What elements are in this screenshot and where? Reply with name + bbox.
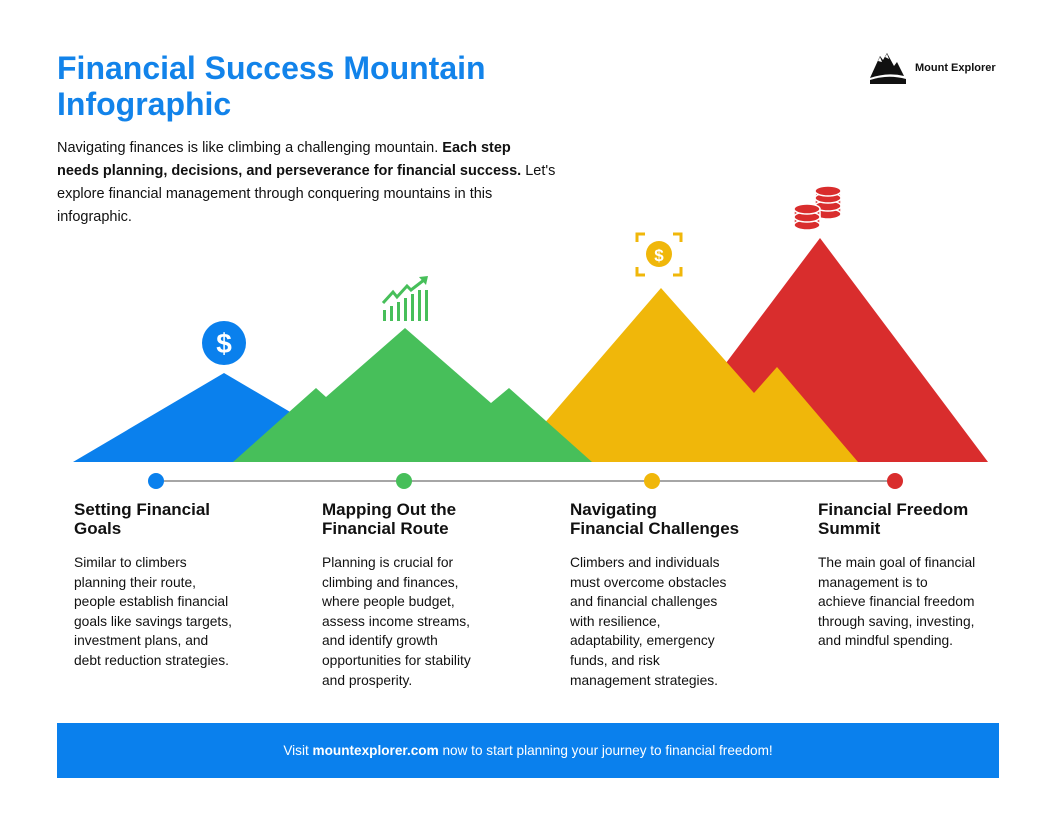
title: Financial Success Mountain: [57, 50, 486, 86]
mountains chart: [73, 186, 988, 489]
column: challenges: adaptability, emergency: [570, 633, 715, 648]
column: summit: The main goal of financial: [818, 555, 975, 570]
column: summit: Financial Freedom: [818, 500, 968, 519]
intro text: infographic.: [57, 209, 132, 225]
mountain: green: [233, 328, 592, 462]
column: summit: [818, 500, 975, 648]
column: challenges: Climbers and individuals: [570, 555, 720, 570]
column: setting goals: debt reduction strategies.: [74, 653, 229, 668]
column: mapping route: Planning is crucial for: [322, 555, 453, 570]
icon: dollar circle: $: [216, 328, 232, 359]
column: setting goals: Similar to climbers: [74, 555, 187, 570]
column: mapping route: opportunities for stability: [322, 653, 471, 668]
column: challenges: must overcome obstacles: [570, 575, 726, 590]
column: challenges: with resilience,: [570, 614, 660, 629]
column: mapping route: and prosperity.: [322, 673, 412, 688]
column: mapping route: assess income streams,: [322, 614, 470, 629]
mountain: red: [700, 238, 988, 462]
title: [57, 50, 486, 122]
column: setting goals: planning their route,: [74, 575, 196, 590]
footer banner: [57, 723, 999, 778]
column: challenges: Financial Challenges: [570, 519, 739, 538]
column: challenges: [570, 500, 739, 688]
column: summit: Summit: [818, 519, 880, 538]
column: mapping route: [322, 500, 471, 688]
footer banner: Visit mountexplorer.com now to start planning your journey to financial freedom!: [283, 743, 773, 758]
icon: coins: [794, 186, 841, 230]
mountain: blue: [73, 373, 375, 462]
column: summit: achieve financial freedom: [818, 594, 974, 609]
intro text: explore financial management through conquering mountains in this: [57, 186, 492, 202]
icon: growth chart: [383, 276, 428, 321]
logo: Mount Explorer: [915, 62, 996, 74]
column: mapping route: where people budget,: [322, 594, 455, 609]
intro text: Navigating finances is like climbing a challenging mountain. Each step: [57, 140, 511, 156]
column: setting goals: Setting Financial: [74, 500, 210, 519]
column: mapping route: Financial Route: [322, 519, 449, 538]
logo: [870, 53, 996, 84]
icon: dollar focus: [637, 234, 681, 275]
column: mapping route: and identify growth: [322, 633, 438, 648]
column: challenges: funds, and risk: [570, 653, 660, 668]
column: challenges: and financial challenges: [570, 594, 717, 609]
column: mapping route: climbing and finances,: [322, 575, 459, 590]
timeline: [148, 473, 903, 489]
mountain: yellow: [511, 288, 858, 462]
icon: dollar circle: [202, 321, 246, 365]
column: setting goals: goals like savings targets,: [74, 614, 232, 629]
column: mapping route: Mapping Out the: [322, 500, 456, 519]
column: challenges: Navigating: [570, 500, 657, 519]
icon: dollar focus: $: [654, 246, 664, 265]
column: summit: management is to: [818, 575, 928, 590]
intro text: needs planning, decisions, and perseverance for financial success. Let's: [57, 163, 555, 179]
column: setting goals: investment plans, and: [74, 633, 208, 648]
column: challenges: management strategies.: [570, 673, 718, 688]
column: setting goals: [74, 500, 232, 668]
column: setting goals: Goals: [74, 519, 121, 538]
intro text: [57, 140, 555, 225]
column: summit: and mindful spending.: [818, 633, 953, 648]
column: setting goals: people establish financial: [74, 594, 228, 609]
title: Infographic: [57, 86, 231, 122]
column: summit: through saving, investing,: [818, 614, 974, 629]
